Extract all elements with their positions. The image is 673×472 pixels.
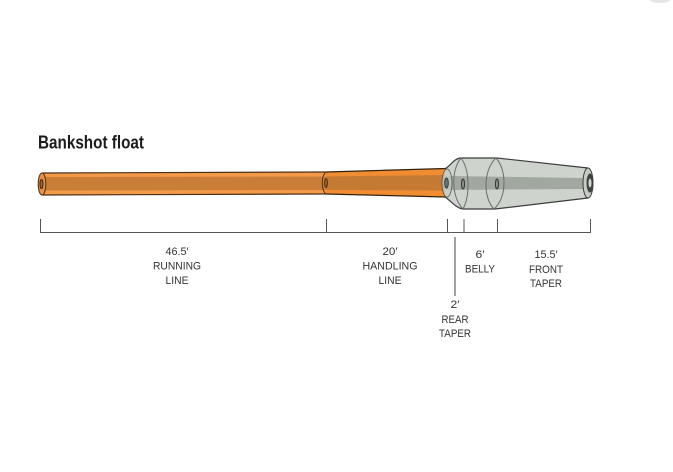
label: belly: 6′ xyxy=(476,249,484,261)
rear taper, belly and front taper head xyxy=(442,158,594,209)
running line xyxy=(38,172,326,195)
label: handling line: 20′ xyxy=(382,246,398,258)
label: running line: LINE xyxy=(166,275,189,287)
joint: belly start xyxy=(454,158,468,209)
label: belly: BELLY xyxy=(465,264,495,276)
label: front taper: TAPER xyxy=(530,278,562,290)
label: handling line: LINE xyxy=(378,275,402,287)
fly line diagram xyxy=(38,158,593,209)
title: Bankshot float xyxy=(38,132,144,152)
label: front taper xyxy=(529,249,563,290)
rear taper leader line xyxy=(454,237,456,296)
label: handling line xyxy=(362,246,418,287)
handling line xyxy=(322,168,446,197)
label: handling line: HANDLING xyxy=(362,260,418,272)
label: running line: RUNNING xyxy=(153,260,201,272)
label: front taper: FRONT xyxy=(529,264,563,276)
label: running line: 46.5′ xyxy=(166,246,188,258)
label: belly xyxy=(465,249,495,276)
joint: rear taper xyxy=(445,178,448,188)
corner smudge xyxy=(649,0,671,3)
joint: belly end xyxy=(486,158,504,209)
label: front taper: 15.5′ xyxy=(534,249,558,261)
label: rear taper: 2′ xyxy=(450,299,460,311)
label: rear taper xyxy=(439,299,471,340)
line tip xyxy=(583,168,593,198)
label: rear taper: REAR xyxy=(442,314,468,326)
measurement ruler xyxy=(40,219,591,233)
label: rear taper: TAPER xyxy=(439,328,471,340)
label: running line xyxy=(153,246,201,287)
